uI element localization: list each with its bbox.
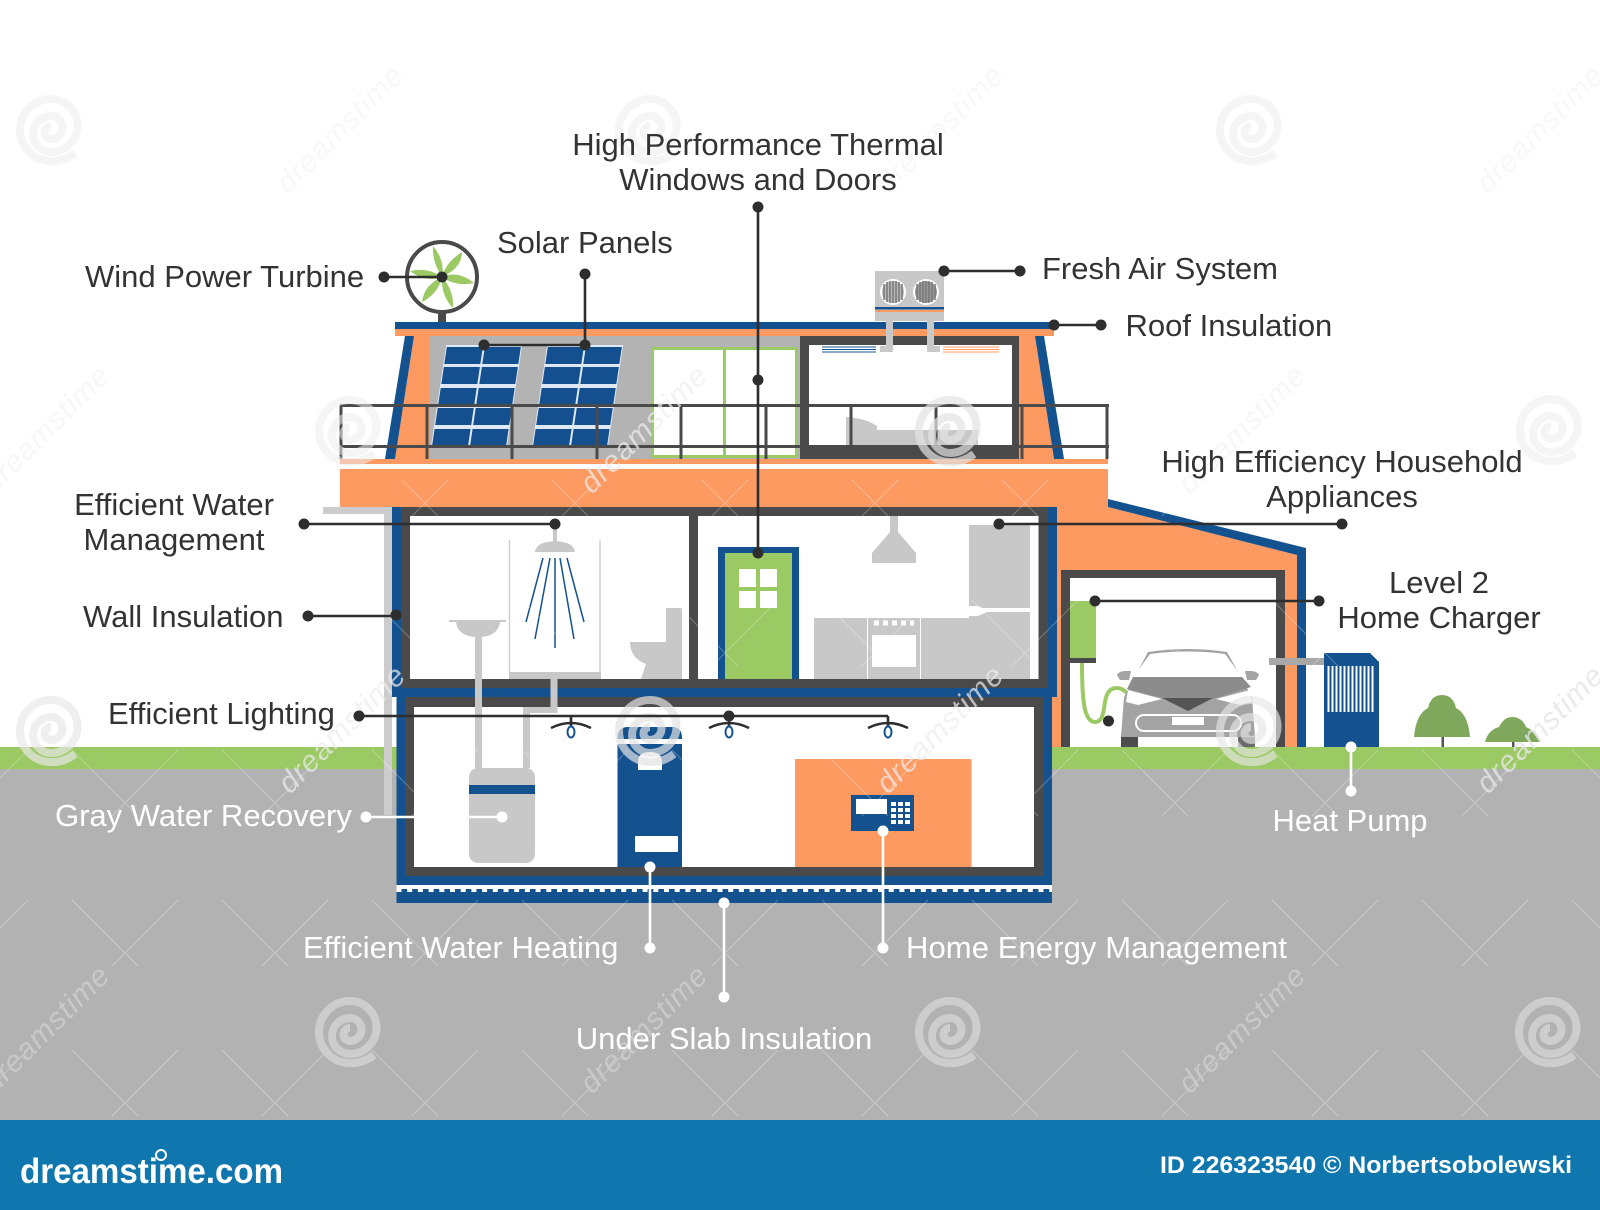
- icon: wind turbine: [407, 242, 477, 323]
- leader lines: dark: [298, 202, 1348, 722]
- label: home energy management: Home Energy Management: [906, 930, 1287, 965]
- lighting fixtures: [551, 716, 908, 738]
- label: wall insulation: Wall Insulation: [83, 599, 283, 634]
- label: home charger: Home Charger: [1337, 600, 1541, 635]
- icon: bed: [846, 417, 978, 448]
- leader lines: white: [360, 742, 1356, 1002]
- watermark pattern: [0, 480, 1600, 1120]
- icon: front door: [718, 547, 799, 679]
- watermark spirals: [20, 400, 1576, 1063]
- upper storey facade: [385, 322, 1064, 459]
- icon: toilet: [630, 608, 682, 679]
- icon: gray water tank: [469, 768, 535, 863]
- dark charger plug: [1103, 716, 1114, 726]
- upper floor rooms: [392, 507, 1057, 697]
- panel: energy management: [795, 759, 972, 867]
- watermark words: dreamstime: [574, 959, 715, 1100]
- icon: solar panel right: [532, 345, 623, 446]
- icon: shower: [509, 525, 601, 679]
- roof: [395, 322, 1054, 336]
- faint watermarks on white: [20, 99, 1578, 461]
- balcony railing: [340, 405, 1109, 459]
- balcony slab: [340, 459, 1108, 507]
- label: water heating: Efficient Water Heating: [303, 930, 618, 965]
- label: home charger: Level 2: [1389, 565, 1489, 600]
- label: roof insulation: Roof Insulation: [1126, 308, 1332, 343]
- watermark words: dreamstime: [1172, 359, 1313, 500]
- watermark words: dreamstime: [870, 659, 1011, 800]
- watermark words: dreamstime: [870, 59, 1011, 200]
- label: gray water recovery: Gray Water Recovery: [55, 798, 352, 833]
- label: appliances: High Efficiency Household: [1161, 444, 1523, 479]
- icon: car: [1117, 649, 1259, 747]
- watermark words: dreamstime: [272, 659, 413, 800]
- label: thermal windows: [572, 127, 944, 197]
- label: wind power turbine: Wind Power Turbine: [85, 259, 364, 294]
- basement: [396, 637, 1052, 903]
- label: thermal windows: Windows and Doors: [619, 162, 897, 197]
- footer banner: [0, 1120, 1600, 1210]
- icon: water heater: [618, 727, 682, 867]
- label: water management: Management: [84, 522, 265, 557]
- under slab insulation: [396, 885, 1052, 903]
- heat pump: [1269, 653, 1379, 747]
- sliding door: [652, 348, 796, 457]
- ground: [0, 747, 1600, 1120]
- icon: fresh air unit: [822, 271, 999, 352]
- icon: sink: [449, 620, 506, 637]
- image credit: ID 226323540 © Norbertsobolewski: [1160, 1152, 1572, 1179]
- label: heat pump: Heat Pump: [1272, 803, 1428, 838]
- icon: solar panel left: [431, 345, 522, 446]
- icon: trees: [1414, 695, 1540, 747]
- label: home charger: [1337, 565, 1541, 635]
- water pipes: [475, 637, 558, 768]
- icon: wall charger: [1070, 601, 1127, 722]
- icon: kitchen: [814, 516, 1030, 679]
- label: fresh air system: Fresh Air System: [1042, 251, 1278, 286]
- label: solar panels: Solar Panels: [497, 225, 673, 260]
- label: appliances: Appliances: [1266, 479, 1418, 514]
- label: water management: Efficient Water: [74, 487, 274, 522]
- gutter and downpipe: [323, 507, 392, 815]
- label: under slab insulation: Under Slab Insulation: [576, 1021, 872, 1056]
- label: thermal windows: High Performance Thermal: [572, 127, 944, 162]
- watermark words: dreamstime: [574, 359, 715, 500]
- label: appliances: [1161, 444, 1523, 514]
- label: efficient lighting: Efficient Lighting: [108, 696, 335, 731]
- sink pedestal over basement wall: [475, 679, 482, 707]
- watermark words: dreamstime: [270, 59, 411, 200]
- label: water management: [74, 487, 274, 557]
- brand logo: dreamstime.com: [20, 1152, 283, 1191]
- watermark words: dreamstime: [1172, 959, 1313, 1100]
- garage: [1052, 499, 1306, 747]
